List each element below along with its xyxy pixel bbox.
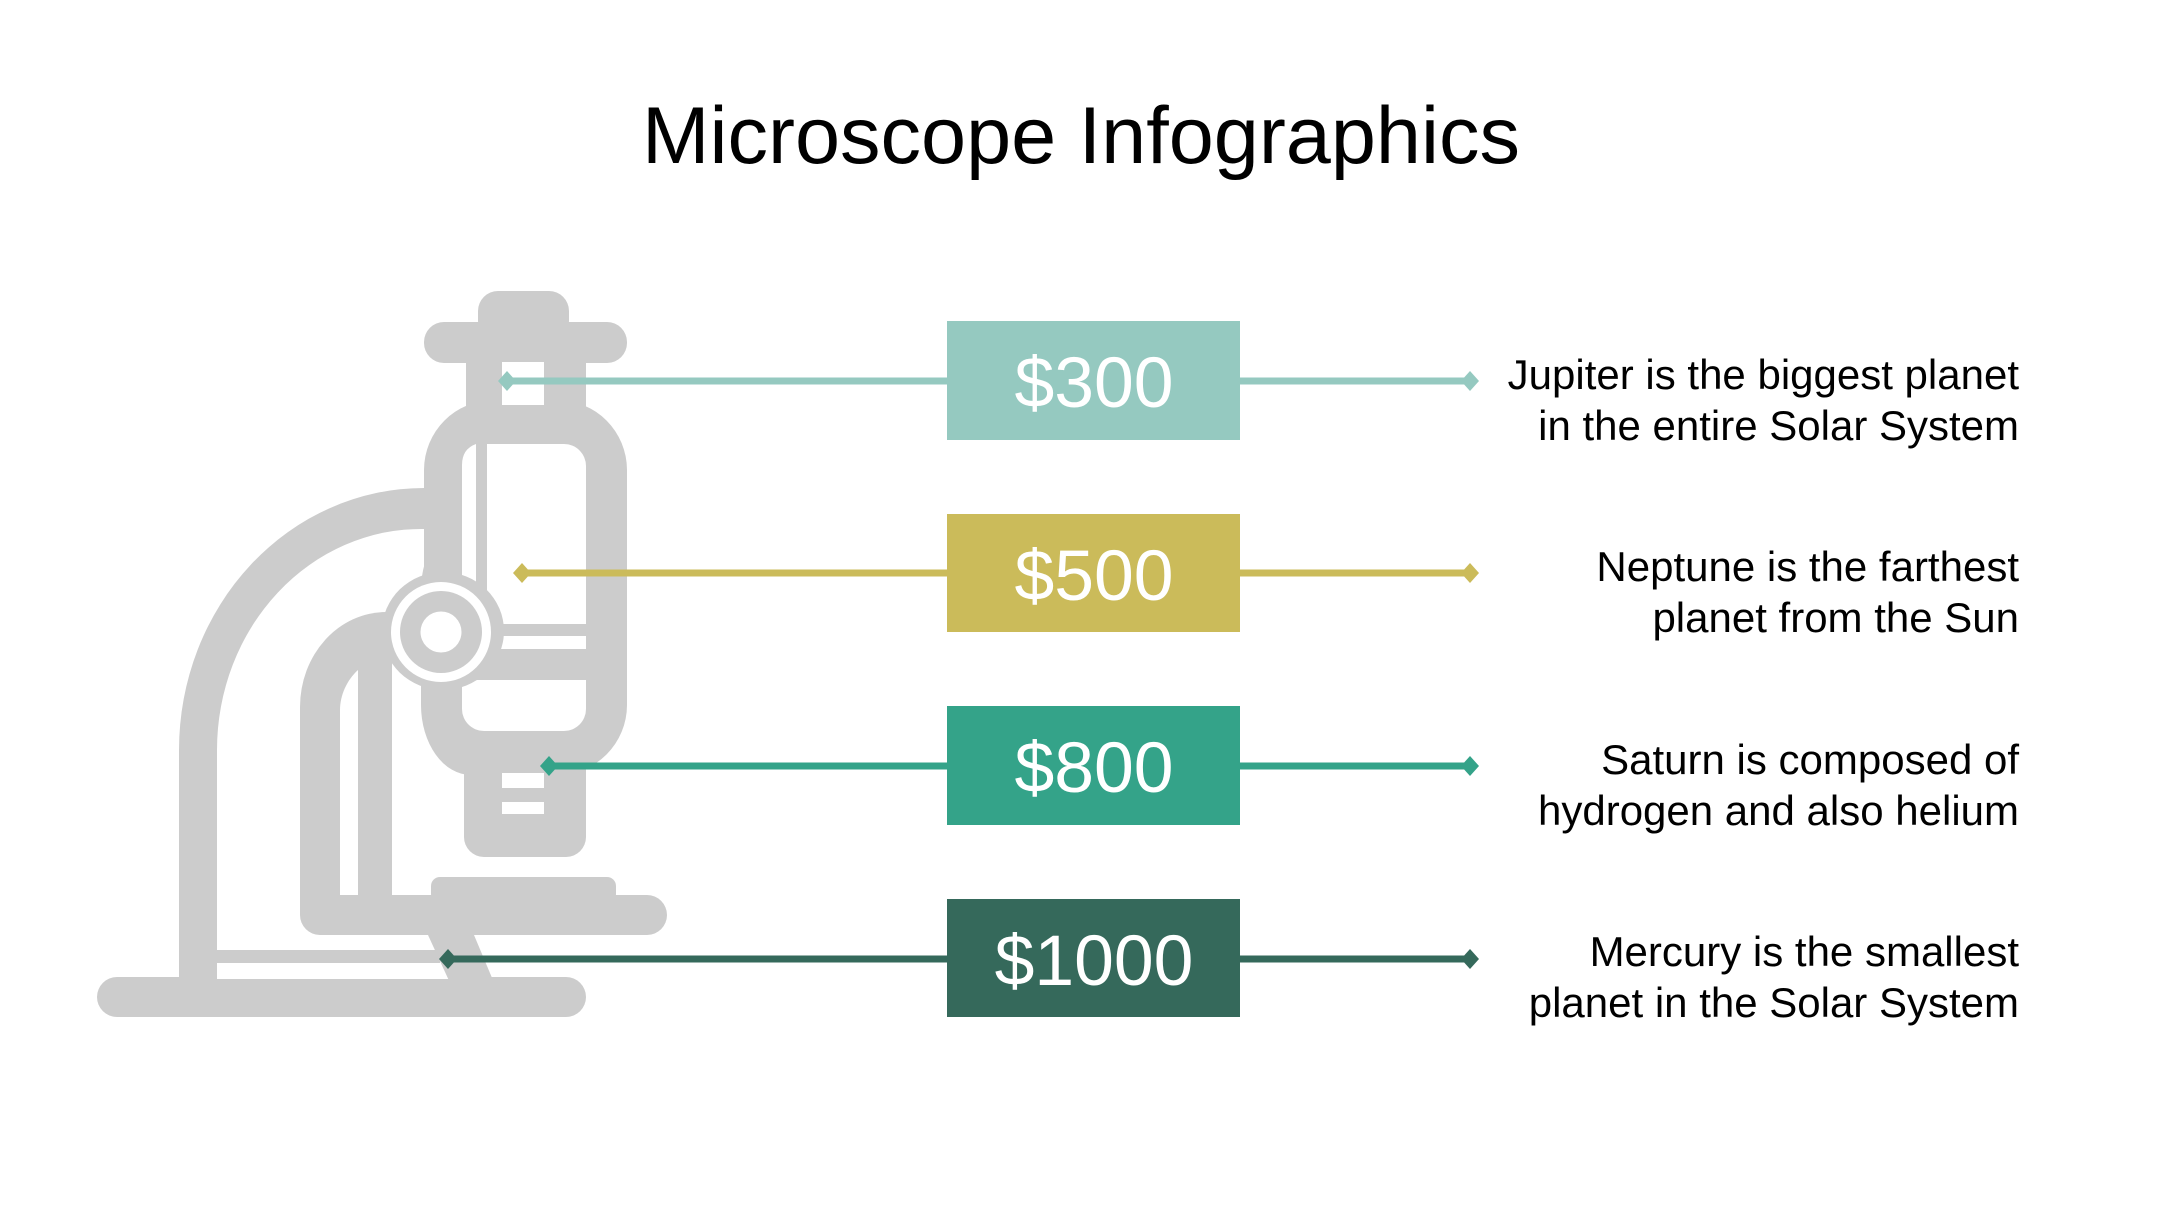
connector line xyxy=(513,563,1479,583)
value: $500 xyxy=(1014,536,1174,616)
connector line xyxy=(439,949,1479,969)
description: planet from the Sun xyxy=(1652,594,2019,641)
row: $800 Saturn xyxy=(540,706,2019,834)
connector line xyxy=(498,371,1479,391)
description: hydrogen and also helium xyxy=(1538,787,2019,834)
value box xyxy=(947,514,1240,632)
icon: microscope diagonal support xyxy=(428,935,495,985)
row: $500 Neptune xyxy=(513,514,2019,641)
description: Saturn is composed of xyxy=(1601,736,2019,783)
icon: microscope xyxy=(97,291,667,1017)
value box xyxy=(947,706,1240,825)
description: Neptune is the farthest xyxy=(1596,543,2019,590)
value box xyxy=(947,899,1240,1017)
description: in the entire Solar System xyxy=(1538,402,2019,449)
description: Jupiter is the biggest planet xyxy=(1508,351,2019,398)
row: $1000 Mercury xyxy=(439,899,2019,1026)
description: Mercury is the smallest xyxy=(1590,928,2019,975)
value: $1000 xyxy=(995,921,1193,1001)
value: $800 xyxy=(1014,728,1174,808)
description: planet in the Solar System xyxy=(1529,979,2019,1026)
icon: microscope knob xyxy=(382,572,504,690)
value: $300 xyxy=(1014,343,1174,423)
title: Microscope Infographics xyxy=(642,91,1520,181)
connector line xyxy=(540,756,1479,776)
row: $300 Jupiter xyxy=(498,321,2019,449)
value box xyxy=(947,321,1240,440)
